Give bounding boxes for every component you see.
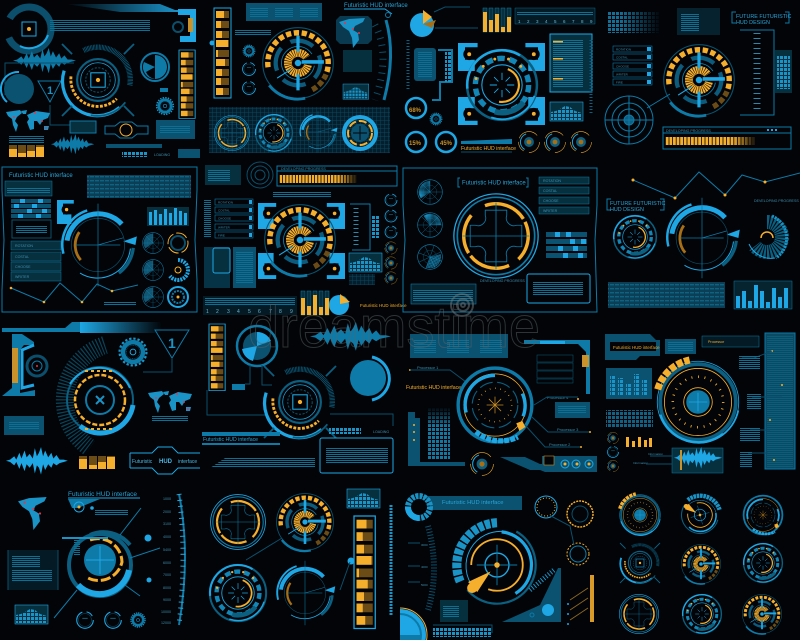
processor tab — [702, 336, 759, 347]
text box — [320, 438, 393, 473]
number row: 3 — [227, 309, 230, 315]
panel: HUD 15 — [400, 493, 594, 640]
label — [409, 365, 466, 382]
frame — [2, 167, 197, 312]
small dials — [143, 233, 188, 307]
banner with ring — [408, 496, 522, 518]
percent gauges: 15% — [409, 141, 422, 147]
leader lines — [54, 508, 160, 618]
frame — [403, 168, 597, 312]
HUD label — [105, 122, 148, 138]
title: Futuristic HUD interface — [68, 491, 137, 498]
left text box — [8, 550, 58, 590]
title bracket: FUTURE FUTURISTIC — [610, 201, 666, 207]
dial 7 — [619, 594, 659, 634]
number row: 7 — [572, 19, 575, 24]
loading — [329, 428, 389, 434]
yellow label: Futuristic HUD interface — [360, 303, 407, 308]
progress bar: DEVELOPING PROGRESS — [281, 167, 326, 171]
label: DEVELOPING PROGRESS — [754, 199, 799, 203]
keypad — [606, 410, 653, 427]
world map — [6, 110, 50, 132]
panel: HUD 14 — [605, 333, 795, 473]
number row: 5 — [554, 19, 557, 24]
dots — [144, 534, 152, 582]
panel: HUD 9 — [2, 322, 200, 475]
scale arc: 3100 — [163, 522, 171, 526]
pie chart — [410, 7, 478, 37]
dot — [348, 558, 354, 564]
hatch — [273, 192, 331, 198]
number row: 6 — [258, 309, 261, 315]
top boxes — [246, 3, 322, 21]
small orange dials — [517, 130, 593, 154]
chart box — [440, 600, 468, 622]
panel: HUD 11 — [8, 491, 185, 628]
panel: HUD 12 — [210, 489, 391, 628]
left bracket — [2, 334, 35, 396]
label: DEVELOPING PROGRESS — [480, 279, 525, 283]
number row: 8 — [279, 309, 282, 315]
list: COSTAL — [218, 208, 230, 212]
option list: ROTATION — [15, 244, 33, 248]
panel: HUD 1 top left — [1, 4, 200, 158]
dial 2 — [669, 484, 731, 546]
pie dial — [141, 53, 169, 92]
small box — [555, 402, 590, 418]
processor labels — [525, 395, 591, 448]
progress bar — [663, 127, 791, 149]
text list box — [550, 34, 592, 92]
gear — [120, 339, 146, 365]
pie dial — [232, 326, 277, 390]
panel: HUD 5 — [406, 7, 595, 154]
blue box — [156, 120, 195, 139]
target — [27, 356, 47, 376]
label banner — [202, 432, 280, 445]
panel: HUD 2 top middle — [209, 3, 408, 153]
left scale — [408, 526, 434, 610]
left info box — [414, 48, 452, 100]
list: ROTATION — [616, 48, 631, 52]
bars and wave — [9, 135, 44, 157]
list: WRITER — [543, 209, 558, 213]
bar strip — [433, 625, 492, 637]
concentric circles — [247, 162, 273, 188]
scale arc: 6000 — [163, 561, 171, 565]
small box — [665, 339, 696, 354]
frame line — [207, 390, 268, 415]
gear — [430, 113, 442, 125]
right connector — [500, 456, 597, 472]
number row: 2 — [216, 309, 219, 315]
bottom stripes — [106, 144, 200, 158]
dotted field — [608, 282, 725, 308]
main dial — [454, 194, 538, 278]
panel: HUD 13 — [406, 334, 597, 477]
pie chart — [329, 294, 350, 315]
grid box — [5, 181, 52, 196]
labels — [739, 355, 761, 468]
label: Processor 1 — [417, 365, 439, 370]
list — [613, 46, 652, 85]
label box — [605, 334, 660, 360]
scale arc: 2000 — [163, 510, 171, 514]
title — [344, 3, 408, 18]
hatch — [210, 458, 315, 468]
connector lines — [5, 63, 74, 125]
number row: 5 — [248, 309, 251, 315]
leader labels: Information — [633, 461, 648, 465]
hatch — [235, 30, 271, 36]
yellow label — [461, 139, 516, 152]
scale arc: 4000 — [163, 535, 171, 539]
area chart — [349, 253, 382, 272]
left tower — [408, 412, 465, 466]
yellow column — [209, 324, 225, 391]
scale arc: 5400 — [163, 548, 171, 552]
scale arc: 7000 — [163, 573, 171, 577]
title bracket: FUTURE FUTURISTIC — [736, 14, 792, 20]
number row: 9 — [290, 309, 293, 315]
small map — [18, 497, 47, 530]
line chart — [632, 172, 800, 200]
waveform — [51, 134, 94, 154]
triangle: 1 — [168, 335, 176, 351]
small pie dials — [414, 180, 446, 273]
bracket — [524, 340, 590, 394]
percent gauges: 68% — [409, 108, 422, 114]
scale arc: 12000 — [161, 621, 171, 625]
list: COSTAL — [616, 56, 628, 60]
map lines — [152, 416, 188, 422]
title bracket — [607, 199, 666, 213]
processor labels: Processor 3 — [557, 427, 579, 432]
number row: 4 — [545, 19, 548, 24]
bracket — [57, 200, 74, 224]
option list — [11, 241, 61, 281]
connector — [330, 414, 393, 426]
yellow column — [179, 50, 195, 118]
list: COSTAL — [543, 189, 557, 193]
dial 8 — [683, 595, 721, 633]
top banner — [50, 4, 195, 32]
level bars — [483, 8, 511, 32]
number row: 9 — [590, 19, 593, 24]
yellow column — [214, 8, 231, 98]
top boxes — [410, 334, 508, 358]
peak chart — [672, 447, 723, 473]
curved scale — [384, 20, 391, 100]
connector — [246, 538, 350, 590]
processor tab: Processor — [708, 340, 725, 344]
list: CHOOSE — [543, 199, 559, 203]
HUD label: Futuristic — [132, 459, 153, 465]
swirl watermark — [451, 294, 473, 316]
main dial — [261, 201, 339, 279]
dark box — [12, 220, 51, 238]
dark box — [70, 121, 96, 133]
radar circle — [1, 72, 34, 104]
yellow level bars — [301, 291, 329, 315]
yellow bars — [79, 456, 115, 469]
yellow label: Futuristic HUD interface — [406, 385, 461, 391]
small gear icons — [77, 612, 145, 628]
radar — [605, 94, 670, 144]
text box — [527, 274, 590, 303]
arc dial — [277, 561, 335, 625]
dot grid — [608, 11, 661, 34]
text box — [677, 8, 720, 35]
waveform — [6, 447, 68, 475]
warning triangle: 1 — [47, 85, 53, 97]
HUD label: interface — [178, 459, 197, 465]
main dial — [67, 367, 133, 433]
loading: LOADING — [373, 430, 389, 434]
number row: 8 — [581, 19, 584, 24]
title: Futuristic HUD interface — [344, 3, 408, 9]
diagonal ticks — [567, 588, 588, 625]
chart box — [411, 284, 476, 304]
dial left — [614, 216, 656, 258]
bar chart — [147, 207, 189, 226]
dark text box — [343, 50, 372, 72]
triangle — [143, 330, 189, 372]
waveform — [13, 48, 76, 73]
dial 3 — [744, 496, 782, 534]
yellow strip — [590, 575, 594, 622]
dot grid — [427, 407, 451, 460]
processor labels: Processor 4 — [547, 395, 569, 400]
left scale: 4000 — [421, 565, 428, 569]
list: ROTATION — [218, 200, 233, 204]
number row — [515, 8, 595, 24]
panel: HUD 3 framed — [2, 167, 197, 312]
main dial — [62, 44, 134, 116]
small dials — [535, 496, 593, 565]
yellow label: Futuristic HUD interface — [461, 146, 516, 152]
blue box — [4, 416, 44, 435]
title bracket: HUD DESIGN — [736, 20, 770, 26]
waveform — [310, 322, 391, 351]
scale arc: 9000 — [163, 598, 171, 602]
yellow dial — [273, 490, 337, 554]
bar chart — [734, 281, 792, 309]
processor labels: Processor 2 — [549, 442, 571, 447]
mini area chart — [343, 84, 369, 99]
percent gauges — [406, 98, 456, 152]
left scale: 5000 — [421, 583, 428, 587]
list: WRITER — [616, 72, 629, 76]
scale ticks — [375, 25, 383, 100]
top banner — [2, 322, 162, 333]
dotted strip — [390, 505, 392, 615]
dial strip — [209, 107, 390, 153]
main dial — [444, 512, 550, 618]
label box: Futuristic HUD interface — [613, 345, 660, 350]
number row: 4 — [237, 309, 240, 315]
bottom stripes: LOADING — [154, 153, 170, 157]
line chart — [10, 283, 138, 303]
block rows — [11, 199, 51, 218]
option list: CHOOSE — [15, 265, 31, 269]
number row — [203, 296, 297, 315]
main dial — [660, 41, 738, 119]
label banner: Futuristic HUD interface — [203, 437, 258, 443]
number row: 2 — [527, 19, 530, 24]
small dial — [469, 451, 495, 477]
small grid — [349, 274, 375, 285]
crosshair dial — [211, 495, 265, 549]
corner brackets — [458, 43, 545, 125]
list — [539, 177, 589, 214]
tall data panel — [742, 333, 795, 469]
big dial — [657, 360, 739, 443]
dial 6 — [744, 544, 782, 582]
area chart — [550, 102, 583, 121]
number row: 1 — [206, 309, 209, 315]
scale arc: 10000 — [161, 610, 171, 614]
list: WRITER — [218, 226, 231, 230]
fan dial — [749, 216, 787, 258]
list: FIRE — [616, 80, 623, 84]
ring dial — [210, 565, 266, 621]
leader labels: Information — [648, 452, 663, 456]
hatch — [104, 302, 136, 305]
panel: HUD 4 — [203, 162, 407, 315]
main dial — [62, 532, 131, 596]
banner with ring: Futuristic HUD interface — [442, 500, 504, 506]
yellow column — [354, 516, 375, 628]
small gauge circles — [384, 194, 398, 285]
scale arc: 1000 — [163, 497, 171, 501]
main dial — [264, 366, 336, 438]
small dials — [607, 432, 619, 472]
HUD label: HUD — [159, 459, 173, 465]
list — [537, 355, 573, 383]
scale arc: 8000 — [163, 586, 171, 590]
warning triangle — [38, 81, 61, 102]
panel: HUD 8 — [607, 172, 800, 309]
main dial — [458, 368, 532, 442]
vertical scale — [740, 30, 792, 115]
panel: dial collection — [619, 484, 784, 636]
left scale: 3000 — [421, 543, 428, 547]
dial 1 — [620, 494, 660, 535]
number row: 6 — [563, 19, 566, 24]
dial center — [667, 198, 740, 278]
mini chart — [347, 489, 380, 508]
leader labels — [633, 452, 672, 465]
main dial — [259, 24, 337, 102]
progress bar: DEVELOPING PROGRESS — [666, 129, 711, 133]
percent gauges: 45% — [440, 141, 453, 147]
mini chart — [15, 605, 48, 624]
corner deco — [502, 568, 561, 622]
title bracket — [732, 12, 792, 26]
title: Futuristic HUD interface — [462, 180, 526, 186]
panel: HUD 10 — [202, 322, 393, 473]
main dial — [62, 204, 137, 286]
small gears — [243, 45, 255, 94]
number row: 3 — [536, 19, 539, 24]
level bars — [626, 437, 652, 447]
dotted field — [87, 175, 191, 198]
gear — [157, 98, 173, 114]
map box — [336, 16, 372, 48]
bars box — [606, 368, 652, 399]
scale arc — [161, 494, 185, 625]
connector bracket — [173, 9, 196, 42]
hatched arc — [65, 345, 105, 448]
main dial — [467, 50, 537, 120]
radar circle — [350, 357, 389, 400]
title — [458, 178, 528, 187]
option list: WRITER — [15, 275, 30, 279]
progress bar — [277, 166, 397, 186]
corner brackets — [258, 203, 345, 279]
panel: HUD 7 framed — [403, 168, 597, 316]
block rows — [546, 232, 587, 258]
dial 4 — [620, 543, 660, 583]
side ticks — [408, 40, 591, 115]
list: FIRE — [218, 234, 225, 238]
dial 9 — [740, 592, 784, 636]
title bracket: HUD DESIGN — [610, 207, 644, 213]
text box — [205, 165, 241, 185]
corner dial — [400, 608, 428, 640]
list: CHOOSE — [218, 216, 231, 220]
dot — [210, 40, 214, 46]
number row: 7 — [269, 309, 272, 315]
title — [68, 491, 140, 516]
info boxes — [204, 247, 256, 288]
dial 5 — [679, 542, 723, 586]
list: ROTATION — [543, 179, 561, 183]
list: CHOOSE — [616, 64, 629, 68]
HUD label — [130, 447, 200, 474]
title: Futuristic HUD interface — [9, 173, 73, 179]
list — [204, 199, 253, 238]
scale and mini bar — [350, 204, 380, 250]
watermark: dreamstime — [248, 295, 540, 360]
panel: HUD 6 — [605, 8, 792, 149]
number row: 1 — [518, 19, 521, 24]
option list: COSTAL — [15, 255, 29, 259]
world map — [148, 391, 192, 413]
small square dial — [7, 7, 51, 51]
